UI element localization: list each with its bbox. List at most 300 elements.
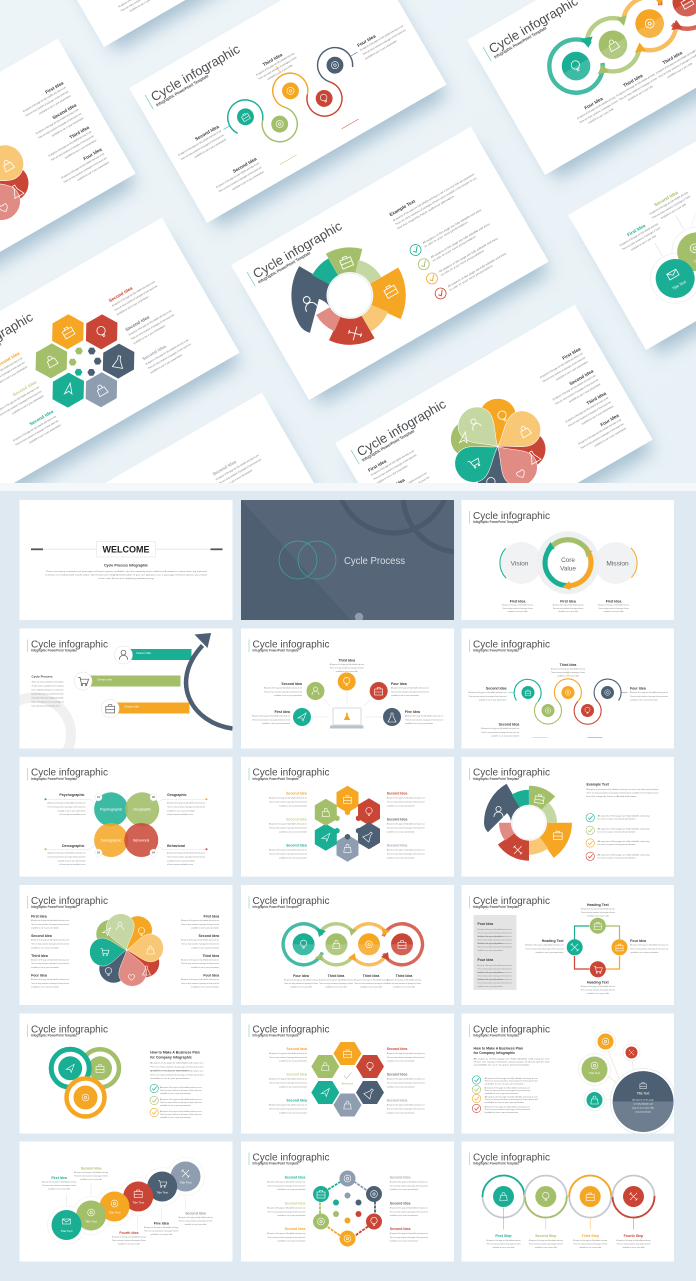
title: Cycle infographic <box>473 639 550 650</box>
right text 3: Second Idea <box>387 844 407 848</box>
heading bottom <box>581 980 616 995</box>
text block: cycle process: If you are going to use a passage of <box>32 700 64 704</box>
big circle: Title Text <box>637 1092 650 1096</box>
petal: demographic <box>94 823 128 857</box>
right text 1 <box>387 792 425 807</box>
node: green <box>590 918 606 934</box>
paragraph <box>474 1058 550 1066</box>
right text 1 <box>387 1047 425 1063</box>
petal: psychographic <box>94 792 128 826</box>
core value ring: Core <box>561 557 575 564</box>
big circle: are fully editable and <box>634 1102 654 1106</box>
petal: demographic: Demographic <box>101 838 121 842</box>
label: geographic <box>167 793 206 816</box>
label: psychographic: of lorem ipsum available to use <box>60 813 86 816</box>
node: teal <box>522 686 534 699</box>
core value ring <box>536 530 600 595</box>
right text 3 <box>181 954 220 969</box>
third step <box>573 1234 608 1249</box>
four idea: Four Idea <box>391 682 407 686</box>
right text 1: Second Idea <box>387 792 407 796</box>
heading: for Company Infographic <box>150 1056 192 1060</box>
big circle: next presentation <box>635 1110 652 1114</box>
right text 2: Second Idea <box>387 818 407 822</box>
number badges <box>95 794 157 856</box>
node: light slate: Title Text <box>180 1180 192 1184</box>
collage slide: S curve <box>129 0 452 232</box>
four idea right: Four Idea <box>630 939 646 943</box>
title: Infographic PowerPoint Template <box>31 905 77 909</box>
node: red <box>581 704 594 717</box>
left text 2: Second Idea <box>286 818 307 822</box>
connector arrows <box>311 688 382 717</box>
slide: welcome <box>20 500 232 620</box>
step ring: orange <box>569 1176 611 1218</box>
bar: orange with pencil icon <box>101 700 190 718</box>
slide: flat hexagons <box>241 1014 454 1134</box>
second idea: Second Idea <box>281 682 302 686</box>
left text 3: Third Idea <box>31 954 48 958</box>
caption 2 <box>319 974 354 989</box>
title: Cycle infographic <box>473 1024 550 1035</box>
petal icons <box>100 922 154 980</box>
right text 1: First Idea <box>204 914 219 918</box>
node: orange <box>612 939 628 955</box>
big circle: easy to use in your slide <box>632 1106 655 1110</box>
label: second idea left <box>468 686 507 702</box>
collage slide: step text (top left) <box>26 0 349 56</box>
petal: geographic <box>125 792 159 826</box>
title: Infographic PowerPoint Template <box>252 1162 299 1166</box>
hero: perspective slide collage <box>0 0 696 483</box>
left text 3: Second Idea <box>286 844 307 848</box>
flower petals <box>88 911 165 989</box>
left text 3 <box>269 844 308 859</box>
left text 2 <box>31 934 70 949</box>
big circle <box>610 1068 676 1134</box>
hex: slate <box>356 1081 384 1104</box>
caption: first idea right: First Idea <box>606 600 621 604</box>
title: Cycle infographic <box>252 639 330 650</box>
heading: How to Make A Business Plan <box>150 1050 200 1054</box>
label: demographic <box>48 844 86 866</box>
collage slide: flower <box>335 305 658 587</box>
label: four idea <box>630 686 669 702</box>
label: five idea: Five Idea <box>154 1222 169 1226</box>
step ring: teal <box>482 1176 524 1218</box>
title: Cycle infographic <box>252 1024 330 1035</box>
left text 1 <box>267 1176 306 1191</box>
node: green <box>578 1054 610 1086</box>
grey side panel: Four Idea <box>478 958 493 962</box>
label: behavioral: Behavioral <box>167 844 185 848</box>
text block: cycle process: of lorem ipsum available but the majority <box>32 684 64 688</box>
left text 3: Second Idea <box>286 1099 307 1103</box>
node: red <box>391 933 413 955</box>
example text: All aspects of this page are fully editable and easy to use in your next slide and presentation <box>586 788 659 791</box>
caption 2: Third Idea <box>328 974 344 978</box>
badge numbers: 02 <box>152 795 155 799</box>
node: orange <box>340 1230 356 1246</box>
vision circle: Vision <box>511 560 529 568</box>
background arcs <box>337 421 517 552</box>
right text 2: Second Idea <box>390 1202 410 1206</box>
title: Infographic PowerPoint Template <box>473 1162 519 1166</box>
slide: three rings <box>20 1014 232 1134</box>
right text 3 <box>387 1099 425 1114</box>
title: Cycle infographic <box>473 768 550 779</box>
collage slide: cycle arrows <box>467 0 696 184</box>
node: slate <box>601 686 614 699</box>
slide: stacked arrow bars <box>20 628 232 748</box>
badge numbers: 04 <box>152 851 155 855</box>
grey side panel <box>474 915 516 990</box>
check: orange <box>150 1108 203 1119</box>
inner small dots <box>333 1192 362 1224</box>
label: second idea <box>74 1166 109 1181</box>
title: Cycle infographic <box>473 1152 550 1163</box>
donut icons <box>494 794 562 854</box>
section title: Cycle Process <box>344 556 405 567</box>
title: Cycle infographic <box>252 896 330 907</box>
left text 1 <box>269 792 308 807</box>
left text 1: Second Idea <box>286 1047 307 1051</box>
node: green <box>542 704 554 717</box>
welcome body: to be sure there isn't anything embarrassing <box>98 577 155 580</box>
left text 1 <box>269 1047 308 1063</box>
ring: green <box>81 1049 119 1087</box>
example text: but the majority have suffered alteration <box>586 795 638 798</box>
text block: cycle process <box>32 674 64 708</box>
text block: cycle process: have suffered alteration in some form <box>32 688 64 692</box>
welcome body <box>46 570 208 580</box>
node: slate <box>147 1172 177 1202</box>
caption 1 <box>284 974 319 989</box>
label: third idea <box>551 663 586 678</box>
left text 2: Second Idea <box>31 934 52 938</box>
second step: Second Step <box>535 1234 556 1238</box>
label: demographic: of lorem ipsum available to use <box>60 863 86 866</box>
label: second idea grey <box>178 1212 213 1226</box>
node: red <box>123 1182 153 1212</box>
title: Cycle infographic <box>252 768 330 779</box>
check: teal <box>150 1084 203 1095</box>
bar: teal with thumb icon: Dream title <box>136 651 151 655</box>
check: red <box>472 1104 531 1114</box>
title: Cycle infographic <box>252 1152 330 1163</box>
right text 1 <box>181 914 220 930</box>
title: Infographic PowerPoint Template <box>31 1034 77 1038</box>
node: green: Title Text <box>85 1220 97 1224</box>
right text 1: Second Idea <box>390 1176 410 1180</box>
hex: green <box>315 799 337 826</box>
right text 3 <box>390 1227 428 1243</box>
slide: section divider <box>241 500 454 620</box>
title: Infographic PowerPoint Template <box>31 649 77 653</box>
right text 2 <box>181 934 220 949</box>
slide: diagonal circles <box>20 1142 232 1262</box>
hex: red <box>356 1055 384 1078</box>
right text 1 <box>390 1176 428 1191</box>
title: Cycle infographic <box>31 639 108 650</box>
label: third idea: Third Idea <box>560 663 576 667</box>
hex: teal <box>315 824 337 851</box>
caption: first idea right <box>598 600 629 613</box>
mission circle <box>585 532 646 594</box>
label: psychographic: Psychographic <box>59 793 85 797</box>
checklist: orange: to use in your next presentation <box>598 843 637 846</box>
drop lines <box>504 1208 634 1230</box>
slide: pointed hexagons <box>241 756 454 876</box>
laptop <box>330 708 364 728</box>
slide: core value <box>462 500 674 620</box>
caption 4 <box>387 974 422 989</box>
label: fourth idea <box>112 1231 147 1246</box>
heading: for Company Infographic <box>474 1051 515 1055</box>
mission circle: Mission <box>606 560 629 568</box>
node: red <box>366 1214 382 1230</box>
checklist: red: All aspects of this page are fully editable and easy <box>598 853 651 856</box>
caption: first idea center <box>553 600 584 613</box>
first idea: First Idea <box>274 710 290 714</box>
badge numbers: 01 <box>97 795 100 799</box>
left text 1 <box>31 914 70 930</box>
title: Infographic PowerPoint Template <box>252 649 299 653</box>
checklist: green: All aspects of this page are fully editable and easy <box>598 827 651 830</box>
label: demographic: Demographic <box>62 844 85 848</box>
text block: cycle process: There are many variations of passages <box>32 680 64 684</box>
hex: red <box>358 798 380 825</box>
title: Cycle infographic <box>31 896 108 907</box>
ring: teal <box>51 1049 89 1087</box>
collage slide: hexagons with small tags <box>0 218 245 500</box>
collage slide: text column at bottom <box>22 393 345 675</box>
third idea <box>330 658 364 690</box>
big circle: All aspects of this page <box>632 1098 655 1102</box>
check: teal <box>472 1076 538 1085</box>
right text 2 <box>390 1202 428 1217</box>
line end dots <box>44 798 208 850</box>
checklist: red: to use in your next presentation <box>598 856 637 859</box>
label: geographic: Geographic <box>167 793 187 797</box>
connector lines <box>46 799 206 849</box>
node: orange <box>100 1192 130 1222</box>
slide: flower <box>20 885 232 1005</box>
small number tags <box>334 809 361 840</box>
hex: light slate <box>336 835 358 862</box>
separator strip <box>0 483 696 491</box>
slide: big slate circle <box>462 1014 674 1134</box>
slide: four step rings <box>462 1142 674 1262</box>
center label <box>342 1072 353 1086</box>
welcome body: There are many variations of passages of lorem ipsum available, but the majority have suffered alteration in some form, by injected <box>46 570 208 573</box>
slide: square loop <box>462 885 674 1005</box>
node: teal <box>313 1186 329 1202</box>
text block: cycle process: which don't look even slightly believable <box>32 696 64 700</box>
grey side panel: Four Idea <box>478 922 493 926</box>
slide: cycle arrows <box>241 885 454 1005</box>
left text 2 <box>267 1202 306 1217</box>
welcome box <box>96 542 156 557</box>
third idea: Third Idea <box>338 658 355 662</box>
node: teal <box>293 933 315 955</box>
pointer lines <box>66 1184 186 1230</box>
welcome rule <box>31 548 222 550</box>
title: Infographic PowerPoint Template <box>473 1034 519 1038</box>
label: second idea bottom: Second Idea <box>499 722 519 726</box>
heading top: Heading Text <box>587 903 609 907</box>
left text 1: Second Idea <box>285 1176 305 1180</box>
collage slide: flower cropped at left <box>0 39 141 321</box>
slide: donut <box>462 756 674 876</box>
node: orange: Title Text <box>109 1210 121 1214</box>
hex: green <box>311 1055 339 1078</box>
right text 2 <box>387 1073 425 1088</box>
slide: S curve <box>462 628 674 748</box>
label: behavioral <box>167 844 206 866</box>
petal: behavioral <box>124 823 158 857</box>
title: Infographic PowerPoint Template <box>252 1034 299 1038</box>
checklist: green <box>586 826 651 834</box>
hex: light slate <box>334 1094 362 1116</box>
node: red: Title Text <box>132 1200 144 1204</box>
text block: cycle process: by injected humour or randomised words <box>32 692 64 696</box>
node: teal: Title Text <box>61 1229 73 1233</box>
heading top <box>581 903 616 918</box>
background ring <box>0 698 71 772</box>
caption 3 <box>354 974 389 989</box>
node: green: Title Text <box>589 1071 600 1075</box>
slide: venn segments <box>20 756 232 876</box>
bar: green with cart icon <box>74 672 180 690</box>
node: green <box>76 1200 106 1230</box>
petal: psychographic: Psychographic <box>100 808 123 812</box>
left text 2 <box>269 1073 308 1088</box>
label: four idea: Four Idea <box>630 686 646 690</box>
heading left: Heading Text <box>542 939 564 943</box>
label: first idea: First Idea <box>51 1176 67 1180</box>
title: Infographic PowerPoint Template <box>473 905 519 909</box>
second idea <box>264 682 324 700</box>
hex: slate <box>358 822 380 849</box>
right text 4 <box>181 974 220 989</box>
bar: teal with thumb icon <box>114 646 192 664</box>
left text 4: Four Idea <box>31 974 47 978</box>
heading <box>150 1050 200 1060</box>
caption: first idea left: First Idea <box>510 600 525 604</box>
caption 1: Four Idea <box>293 974 309 978</box>
hex: orange <box>334 1042 362 1065</box>
collage slide: overlapping circles at right <box>568 77 696 359</box>
caption 3: Third Idea <box>363 974 379 978</box>
text block: cycle process: Cycle Process <box>32 674 53 678</box>
heading bottom: Heading Text <box>587 980 609 984</box>
four idea right <box>630 939 669 954</box>
node: red <box>623 1044 640 1061</box>
left text 3 <box>269 1099 308 1114</box>
slide: chain ring <box>241 1142 454 1262</box>
title: Infographic PowerPoint Template <box>473 520 519 524</box>
arrowheads <box>315 928 390 961</box>
welcome body: humour, or randomised words which don't look even slightly believable. If you are going to use a passage of lorem ipsum, you need <box>46 574 208 577</box>
title: Infographic PowerPoint Template <box>252 777 299 781</box>
heading: How to Make A Business Plan <box>474 1046 523 1050</box>
step ring: red <box>612 1176 654 1218</box>
heading <box>474 1046 523 1055</box>
label: first idea <box>42 1176 77 1191</box>
right text 3: Third Idea <box>202 954 219 958</box>
check: green <box>472 1085 531 1095</box>
label: geographic: of lorem ipsum available to use <box>167 813 194 816</box>
right text 4: Four Idea <box>203 974 219 978</box>
right text 2: Second Idea <box>198 934 219 938</box>
right text 1: Second Idea <box>387 1047 407 1051</box>
halo rings <box>48 1158 204 1244</box>
caption: first idea left <box>502 600 533 613</box>
right text 2: Second Idea <box>387 1073 407 1077</box>
title: Cycle infographic <box>31 768 108 779</box>
donut chart <box>494 788 564 858</box>
left text 3 <box>267 1227 306 1243</box>
title: Infographic PowerPoint Template <box>252 905 299 909</box>
checklist: green: to use in your next presentation <box>598 830 637 833</box>
node: red <box>590 961 606 977</box>
left text 1: First Idea <box>31 914 47 918</box>
check: green <box>150 1096 203 1107</box>
label: second idea grey: Second Idea <box>185 1212 206 1216</box>
right text 3: Second Idea <box>387 1099 407 1103</box>
bar: orange with pencil icon: Dream title <box>124 704 139 708</box>
node: slate: Title Text <box>156 1190 168 1194</box>
label: fourth idea: Fourth Idea <box>119 1231 138 1235</box>
left text 4 <box>31 974 70 989</box>
caption: first idea center: First Idea <box>560 600 576 604</box>
four idea <box>370 682 430 700</box>
node: light slate <box>170 1162 200 1192</box>
loop connectors <box>574 926 620 969</box>
label: five idea <box>144 1222 179 1236</box>
serpentine line <box>514 679 621 724</box>
slide: laptop ideas <box>241 628 454 748</box>
title: Infographic PowerPoint Template <box>473 649 519 653</box>
diagonal shade <box>241 500 351 620</box>
example text <box>586 783 659 798</box>
node: orange <box>595 1031 616 1052</box>
left text 1: Second Idea <box>286 792 307 796</box>
fourth step <box>616 1234 651 1249</box>
title: Cycle infographic <box>31 1024 108 1035</box>
node: orange <box>358 933 380 955</box>
five idea <box>383 708 444 726</box>
node: teal <box>584 1090 605 1110</box>
bottom dot <box>355 613 363 621</box>
checklist: teal: All aspects of this page are fully editable and easy <box>598 815 651 818</box>
checklist: teal: to use in your next presentation <box>598 818 637 821</box>
badge numbers <box>97 795 155 855</box>
core value ring: Value <box>560 565 576 572</box>
welcome subtitle: Cycle Process Infographic <box>104 564 148 568</box>
center label: Behavior <box>342 1082 353 1086</box>
example text: There are many variations of passages of lorem ipsum available in this template for you <box>586 792 659 795</box>
label: second idea bottom <box>481 722 520 738</box>
check: orange <box>472 1094 538 1103</box>
label: behavioral: of lorem ipsum available to use <box>167 863 194 866</box>
step ring: green <box>525 1176 567 1218</box>
left text 3 <box>31 954 70 969</box>
bar: green with cart icon: Dream title <box>98 678 112 682</box>
checklist: orange <box>586 839 651 847</box>
title: Cycle infographic <box>473 511 550 522</box>
